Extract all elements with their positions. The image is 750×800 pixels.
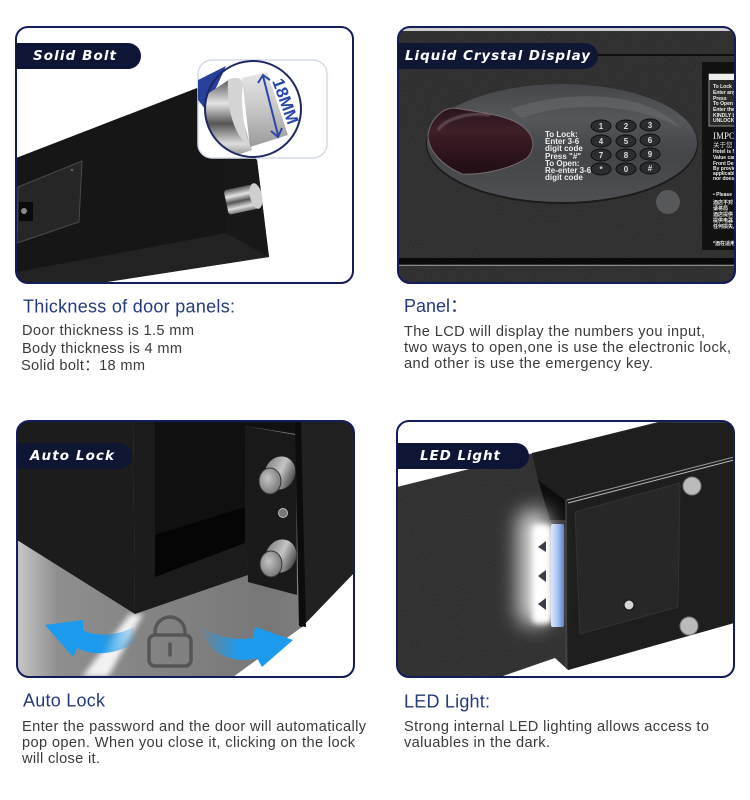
- safe left side: [17, 421, 135, 614]
- text block: panel: two ways to open,one is use the electronic lock,: [404, 340, 731, 356]
- open door: [245, 421, 354, 627]
- instruction label: Enter the: [713, 107, 735, 113]
- emergency key cover: [656, 190, 680, 214]
- dimension arrow: [258, 75, 282, 137]
- label tab: solid bolt: [16, 43, 141, 69]
- keypad buttons: 6: [648, 136, 653, 145]
- door top face: [532, 423, 734, 500]
- instruction label: *酒在适用: [713, 240, 735, 247]
- lock instructions: Re-enter 3-6: [545, 166, 592, 175]
- instruction label: applicable: [713, 171, 738, 177]
- safe front frame: [133, 421, 248, 614]
- instruction label: Press: [713, 96, 727, 102]
- text block: thickness of door panels: [21, 296, 235, 374]
- arrow: right: [203, 627, 293, 667]
- text block: LED light: [404, 692, 709, 751]
- keypad buttons: 2: [624, 122, 629, 131]
- keypad buttons: 1: [599, 122, 604, 131]
- text block: auto lock: Enter the password and the door will automatically: [22, 719, 367, 735]
- text block: thickness of door panels: Body thickness is 4 mm: [22, 341, 182, 357]
- door bolt: upper: [258, 456, 296, 494]
- dimension text: 18MM: [268, 76, 302, 127]
- panel: solid bolt: [16, 27, 353, 283]
- instruction label: KINDLY L: [713, 113, 736, 119]
- text block: thickness of door panels: Solid bolt：18 mm: [21, 358, 145, 374]
- text block: panel: and other is use the emergency key.: [404, 356, 653, 372]
- instruction label: 酒店提供: [713, 211, 733, 218]
- inset: 18mm bolt close-up: [198, 60, 327, 160]
- lock instructions: digit code: [545, 173, 583, 182]
- LED strip: [551, 524, 564, 627]
- label tab: solid bolt: Solid Bolt: [33, 48, 117, 64]
- instruction label: Enter any: [713, 90, 736, 96]
- keypad buttons: *: [599, 165, 603, 174]
- text block: auto lock: [21, 690, 367, 767]
- text block: LED light: Strong internal LED lighting allows access to: [404, 719, 709, 735]
- plate screw: [624, 600, 634, 610]
- instruction label: nor does the: [713, 176, 743, 182]
- lock instructions: Enter 3-6: [545, 137, 580, 146]
- label tab: LED light: LED Light: [420, 448, 501, 464]
- keypad buttons: 4: [599, 137, 604, 146]
- label tab: auto lock: [17, 443, 132, 469]
- instruction label: • Please: [713, 192, 732, 198]
- instruction label: [702, 62, 734, 250]
- door bolt: [224, 182, 265, 215]
- instruction label: 请将局: [713, 205, 728, 212]
- keypad buttons: #: [648, 164, 653, 173]
- text block: LED light: LED Light:: [404, 692, 490, 712]
- keypad buttons: [591, 119, 660, 175]
- lock plate: [17, 161, 82, 243]
- instruction label: UNLOCK: [713, 118, 735, 124]
- door front: [565, 457, 734, 670]
- safe interior: [155, 421, 245, 577]
- keypad buttons: 9: [648, 150, 653, 159]
- icon: padlock: [149, 617, 191, 666]
- instruction label: To Lock: [713, 84, 732, 90]
- label tab: LED light: [397, 443, 529, 469]
- lock instructions: To Open:: [545, 159, 580, 168]
- instruction label: 提供电器: [713, 217, 733, 224]
- instruction label: 关于您: [713, 139, 733, 149]
- keypad buttons: 0: [624, 165, 629, 174]
- display window: [428, 108, 533, 174]
- LED glow: [518, 510, 552, 625]
- instruction label: Front Desk.: [713, 161, 741, 167]
- lock instructions: To Lock:: [545, 130, 578, 139]
- keypad buttons: 8: [624, 151, 629, 160]
- upper door screw: [683, 477, 701, 495]
- lock instructions: Press "#": [545, 152, 581, 161]
- text block: auto lock: Auto Lock: [23, 690, 106, 710]
- instruction label: Hotel is Not: [713, 149, 741, 155]
- panel: auto lock: [17, 421, 354, 677]
- lock instructions: digit code: [545, 144, 583, 153]
- text block: panel: Panel：: [404, 296, 468, 316]
- instruction label: 任何损失,: [713, 223, 735, 230]
- text block: thickness of door panels: Door thickness is 1.5 mm: [22, 323, 194, 339]
- lock plate: [575, 483, 680, 634]
- instruction label: By providing: [713, 166, 744, 172]
- lock instructions: [545, 130, 592, 182]
- panel border: [17, 421, 354, 677]
- door screw: [278, 508, 288, 518]
- keypad housing: [426, 84, 698, 204]
- floor highlights: [82, 573, 354, 677]
- panel: liquid crystal display: [398, 27, 744, 283]
- keypad buttons: 5: [624, 137, 629, 146]
- label tab: auto lock: Auto Lock: [29, 448, 115, 464]
- label tab: liquid crystal display: Liquid Crystal Display: [405, 48, 591, 64]
- label tab: liquid crystal display: [398, 43, 598, 69]
- LED reflector notches: [538, 541, 546, 610]
- text block: thickness of door panels: Thickness of door panels:: [23, 296, 235, 316]
- text block: auto lock: pop open. When you close it, clicking on the lock: [22, 735, 356, 751]
- door bolt: lower: [260, 539, 296, 578]
- keypad buttons: 7: [599, 151, 604, 160]
- text block: auto lock: will close it.: [21, 751, 100, 767]
- panel: LED light: [397, 421, 734, 677]
- panel border: [397, 421, 734, 677]
- safe body: [397, 422, 734, 677]
- instruction label: To Open: [713, 101, 733, 107]
- panel border: [398, 27, 735, 283]
- instruction label: 酒店不对: [713, 199, 733, 206]
- instruction label: Value can be: [713, 155, 744, 161]
- text block: LED light: valuables in the dark.: [404, 735, 550, 751]
- arrow: left: [45, 620, 137, 657]
- text block: panel: [404, 296, 731, 372]
- keypad buttons: 3: [648, 121, 653, 130]
- panel border: [16, 27, 353, 283]
- instruction label: IMPO: [713, 131, 736, 141]
- safe door body: [16, 88, 269, 283]
- lower door screw: [680, 617, 698, 635]
- text block: panel: The LCD will display the numbers you input,: [404, 324, 705, 340]
